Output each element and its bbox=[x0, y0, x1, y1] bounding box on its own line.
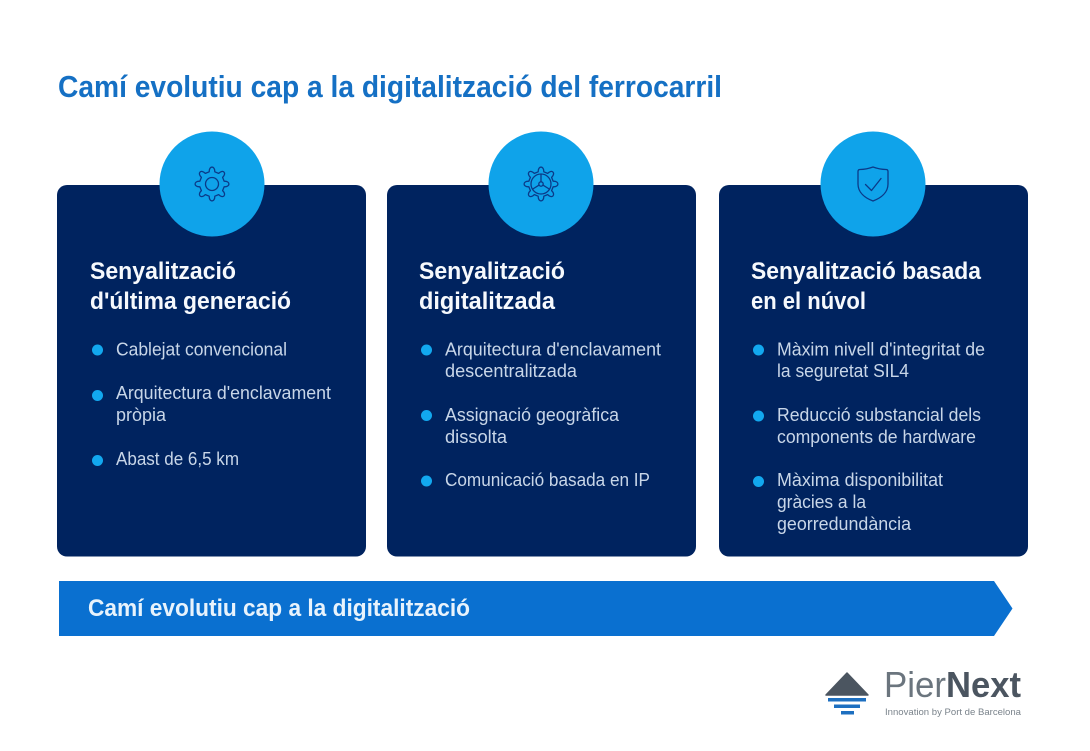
bullet list: gràcies a la bbox=[777, 491, 867, 512]
icon: shield with check bbox=[820, 132, 926, 236]
bullet list: pròpia bbox=[116, 404, 167, 425]
heading: d'última generació bbox=[90, 288, 291, 315]
heading: Senyalització bbox=[419, 258, 565, 285]
bullet list bbox=[753, 338, 985, 534]
heading: Senyalització basada bbox=[751, 258, 982, 285]
icon: gear with steering wheel bbox=[488, 132, 594, 236]
wordmark: Pier bbox=[884, 664, 946, 705]
bullet list: components de hardware bbox=[777, 426, 976, 447]
bullet list: Màxim nivell d'integritat de bbox=[777, 338, 985, 360]
heading: en el núvol bbox=[751, 288, 866, 315]
panel: senyalització digitalitzada bbox=[387, 132, 696, 556]
heading: digitalitzada bbox=[419, 288, 556, 315]
heading bbox=[751, 258, 982, 315]
panel: senyalització basada en el núvol bbox=[719, 132, 1028, 556]
bullet list: Abast de 6,5 km bbox=[116, 448, 239, 469]
bullet list: dissolta bbox=[445, 426, 508, 447]
bullet list: Assignació geogràfica bbox=[445, 404, 620, 425]
icon: logo mark bbox=[826, 673, 868, 714]
tagline: Innovation by Port de Barcelona bbox=[885, 707, 1022, 718]
bullet list: Arquitectura d'enclavament bbox=[445, 338, 661, 360]
bullet list: la seguretat SIL4 bbox=[777, 360, 909, 381]
logo: PierNext bbox=[826, 664, 1022, 718]
bullet list bbox=[421, 338, 661, 490]
heading bbox=[90, 258, 291, 315]
bullet list: georredundància bbox=[777, 513, 912, 534]
bullet list bbox=[92, 338, 331, 469]
logo: PierNext: Next bbox=[946, 664, 1021, 705]
icon: gear bbox=[160, 132, 264, 236]
bullet list: Comunicació basada en IP bbox=[445, 469, 650, 490]
bullet list: Cablejat convencional bbox=[116, 338, 287, 360]
arrow banner bbox=[59, 581, 1012, 636]
bullet list: Reducció substancial dels bbox=[777, 404, 981, 425]
bullet list: Màxima disponibilitat bbox=[777, 469, 943, 490]
bullet list: descentralitzada bbox=[445, 360, 578, 381]
panel: senyalització d'última generació bbox=[57, 132, 366, 556]
heading bbox=[419, 258, 565, 315]
banner label: Camí evolutiu cap a la digitalització bbox=[88, 595, 470, 622]
heading: Senyalització bbox=[90, 258, 236, 285]
title: Camí evolutiu cap a la digitalització del ferrocarril bbox=[58, 69, 722, 104]
bullet list: Arquitectura d'enclavament bbox=[116, 382, 331, 403]
